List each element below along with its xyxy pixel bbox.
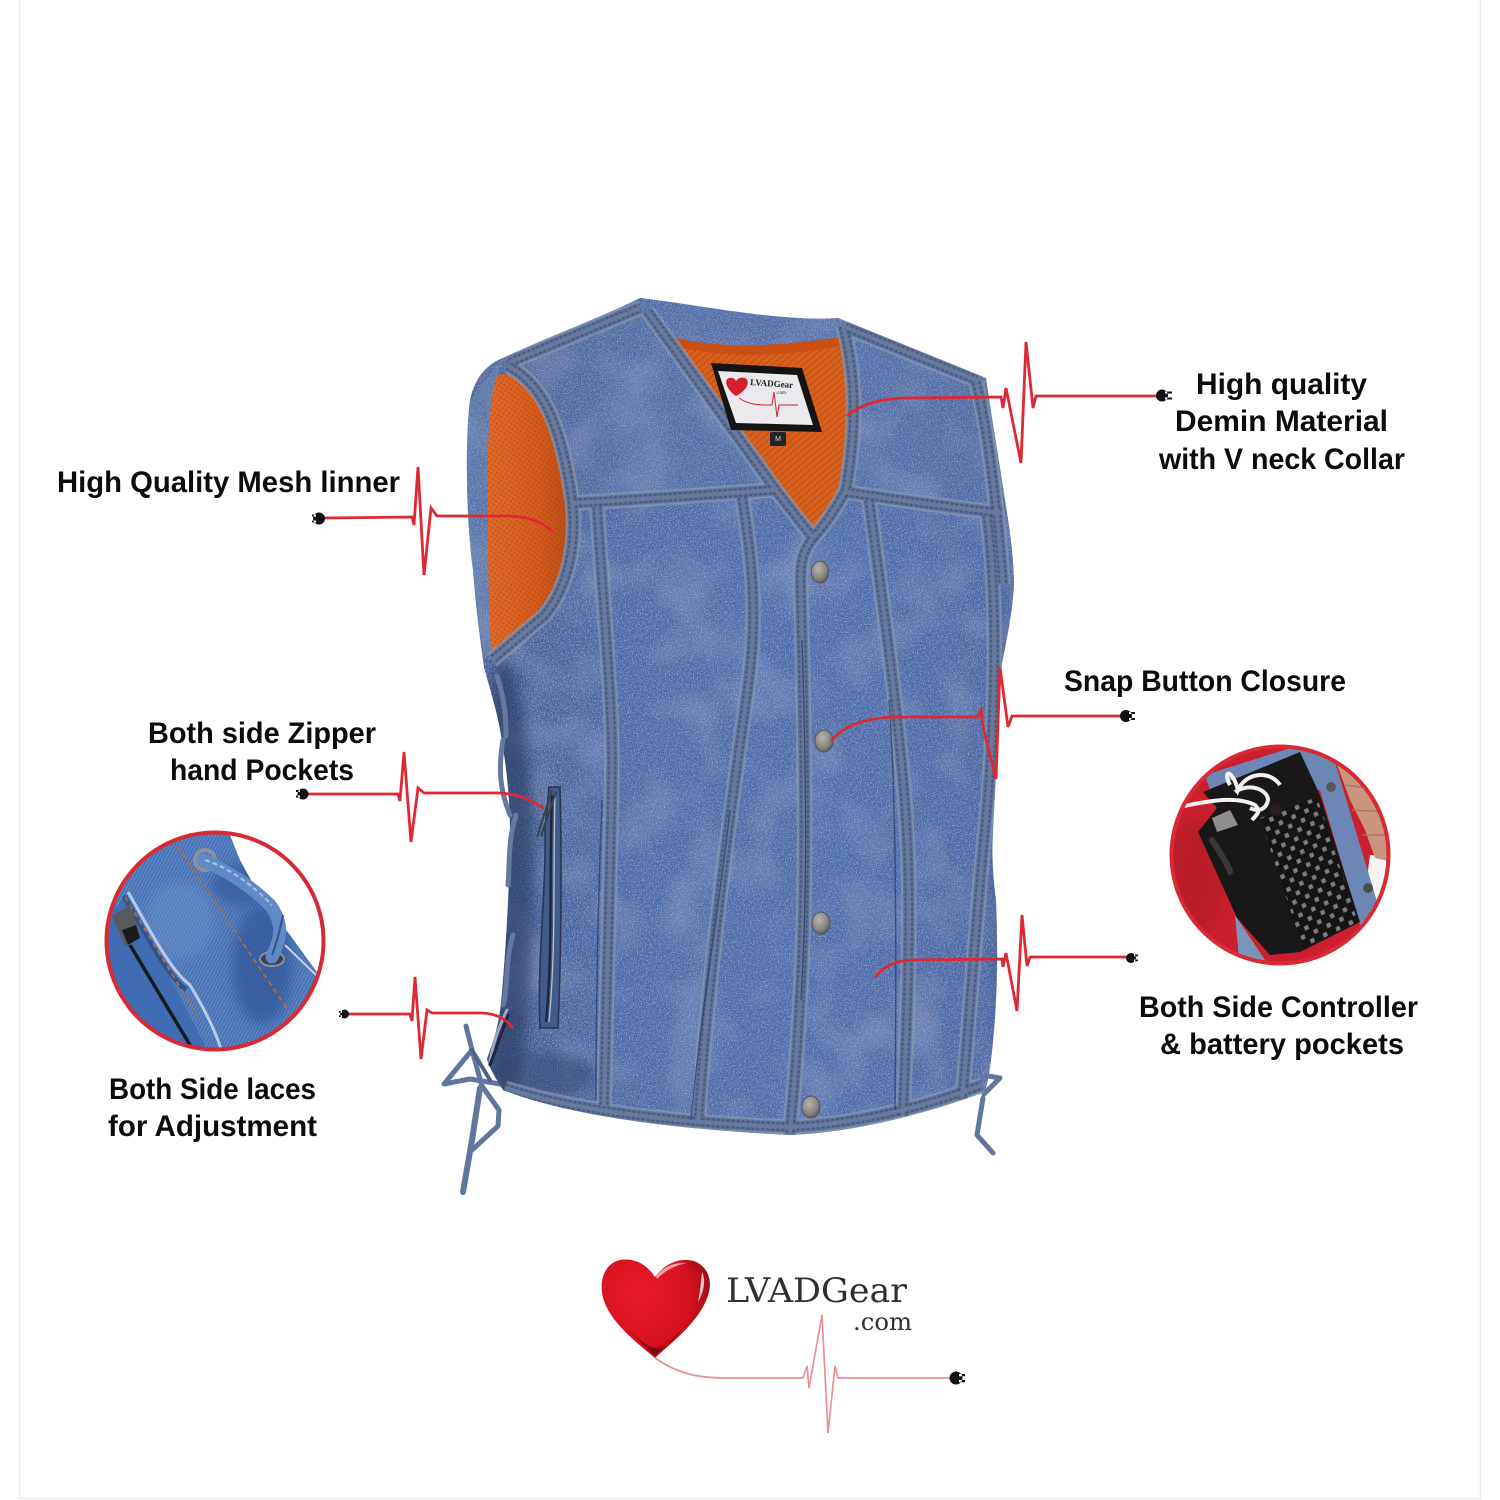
zipper xyxy=(130,945,190,1045)
orange mesh armhole lining xyxy=(488,374,570,658)
label .com text: .com xyxy=(776,391,786,396)
icon: plug xyxy=(1120,710,1135,722)
icon: plug xyxy=(296,788,308,800)
lower left panel xyxy=(108,895,204,1046)
vest body xyxy=(467,298,1014,1135)
text: controller pockets xyxy=(1139,991,1418,1061)
detail photo: side laces xyxy=(104,830,326,1052)
heading: zipper pockets: hand Pockets xyxy=(170,754,354,787)
icon: plug xyxy=(312,512,325,524)
left side tie xyxy=(444,1026,500,1192)
text: side laces: for Adjustment xyxy=(108,1110,317,1143)
text: denim material: with V neck Collar xyxy=(1158,443,1405,476)
label heart xyxy=(726,378,748,396)
size tag xyxy=(770,432,786,446)
mesh panel xyxy=(1260,797,1358,948)
icon: plug xyxy=(1126,953,1138,963)
text: denim material: High quality xyxy=(1196,368,1367,401)
pocket snap xyxy=(1270,804,1282,816)
orange neck lining xyxy=(666,335,853,540)
heading: zipper pockets xyxy=(148,717,376,787)
heading: zipper pockets: Both side Zipper xyxy=(148,717,376,750)
size tag letter: M xyxy=(775,436,781,443)
white cables xyxy=(1184,800,1258,820)
detail photo: controller pocket xyxy=(1165,740,1395,970)
snap studs xyxy=(1326,782,1336,792)
callout line: side laces xyxy=(339,977,512,1059)
snap buttons xyxy=(802,561,833,1118)
callout line: mesh liner xyxy=(312,467,552,575)
side shading xyxy=(467,300,1020,1120)
logo heart xyxy=(602,1260,710,1358)
denim vest product illustration xyxy=(444,298,1020,1192)
white background corner xyxy=(230,836,322,972)
text: denim material: Demin Material xyxy=(1175,405,1388,438)
text: side laces: Both Side laces xyxy=(109,1073,316,1106)
logo heartbeat line xyxy=(655,1315,952,1433)
black pocket xyxy=(1198,752,1360,955)
hand xyxy=(1337,765,1386,861)
phone xyxy=(1212,810,1238,832)
callout line: zipper pockets xyxy=(296,752,543,842)
text: side laces xyxy=(108,1073,317,1143)
lace cord xyxy=(203,860,280,957)
callout line: controller pocket xyxy=(876,915,1138,1011)
denim strip xyxy=(1205,745,1378,925)
heading: snap button: Snap Button Closure xyxy=(1064,665,1346,698)
placket dark edge xyxy=(596,640,896,1120)
side lacing xyxy=(490,676,516,1065)
white background right xyxy=(1361,855,1386,924)
text: controller pockets: Both Side Controller xyxy=(1139,991,1418,1024)
logo wordmark: LVADGear xyxy=(726,1271,908,1311)
right side tie xyxy=(977,1076,1000,1153)
label heartbeat line xyxy=(739,392,798,417)
callout line: snap button xyxy=(832,667,1135,779)
logo: LVADGear xyxy=(602,1260,965,1433)
woven neck label xyxy=(711,363,822,446)
icon: logo plug xyxy=(950,1372,965,1385)
stitched seams xyxy=(492,308,1003,1135)
label brand text: LVADGear xyxy=(750,377,793,390)
text: denim material xyxy=(1158,368,1405,476)
eyelets xyxy=(195,850,215,870)
heading: mesh liner: High Quality Mesh linner xyxy=(57,466,400,499)
side zipper pocket xyxy=(537,787,561,1028)
logo .com: .com xyxy=(853,1308,912,1336)
text: controller pockets: & battery pockets xyxy=(1160,1028,1404,1061)
icon: plug xyxy=(1156,390,1172,402)
icon: plug xyxy=(339,1010,349,1018)
callout line: denim material xyxy=(848,342,1172,463)
orange stitching xyxy=(125,847,290,1020)
